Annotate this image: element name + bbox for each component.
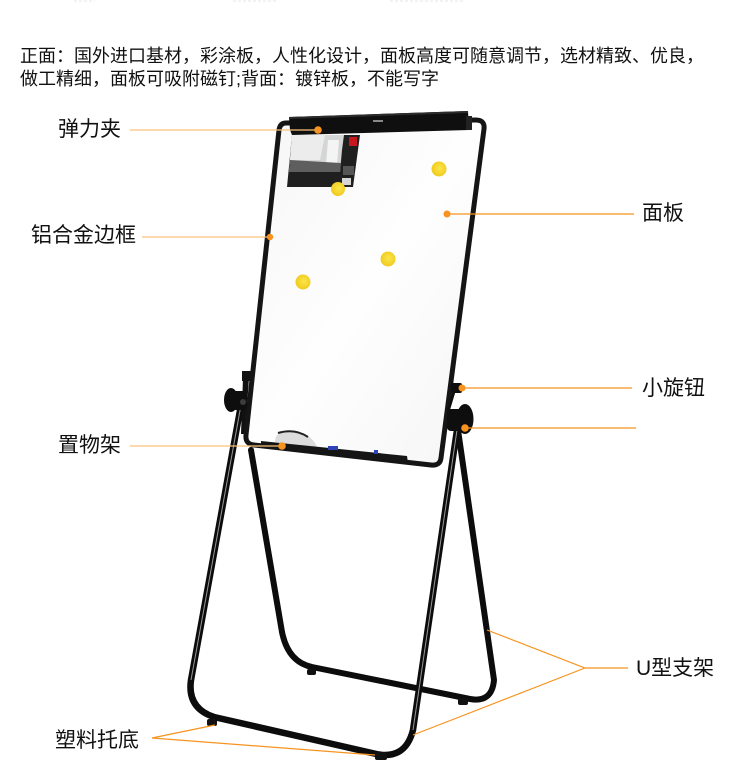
label: aluminum frame: 铝合金边框 <box>31 224 136 247</box>
spring clip bar <box>289 111 472 135</box>
back U-shaped leg <box>251 430 494 700</box>
label: spring clip: 弹力夹 <box>58 118 121 141</box>
label: U-shaped stand: U型支架 <box>636 657 714 680</box>
left hinge bracket <box>241 371 251 434</box>
label: panel: 面板 <box>642 202 684 225</box>
leader dots <box>267 126 469 450</box>
description text <box>20 46 704 89</box>
yellow magnets <box>296 162 446 290</box>
left hinge knob <box>224 388 247 412</box>
right hinge knob <box>447 383 474 434</box>
front U-shaped leg <box>190 405 457 755</box>
label: small knob: 小旋钮 <box>642 377 705 400</box>
clipped text remnants at top edge <box>74 0 463 2</box>
description text: 做工精细，面板可吸附磁钉;背面：镀锌板，不能写字 <box>20 69 439 89</box>
tray <box>261 431 408 463</box>
product poster <box>287 135 360 187</box>
whiteboard panel and frame <box>246 111 484 465</box>
description text: 正面：国外进口基材，彩涂板，人性化设计，面板高度可随意调节，选材精致、优良， <box>20 46 704 66</box>
plastic feet <box>207 669 468 760</box>
leader lines <box>130 130 636 755</box>
label: tray: 置物架 <box>58 434 121 457</box>
label: plastic base: 塑料托底 <box>55 729 139 752</box>
